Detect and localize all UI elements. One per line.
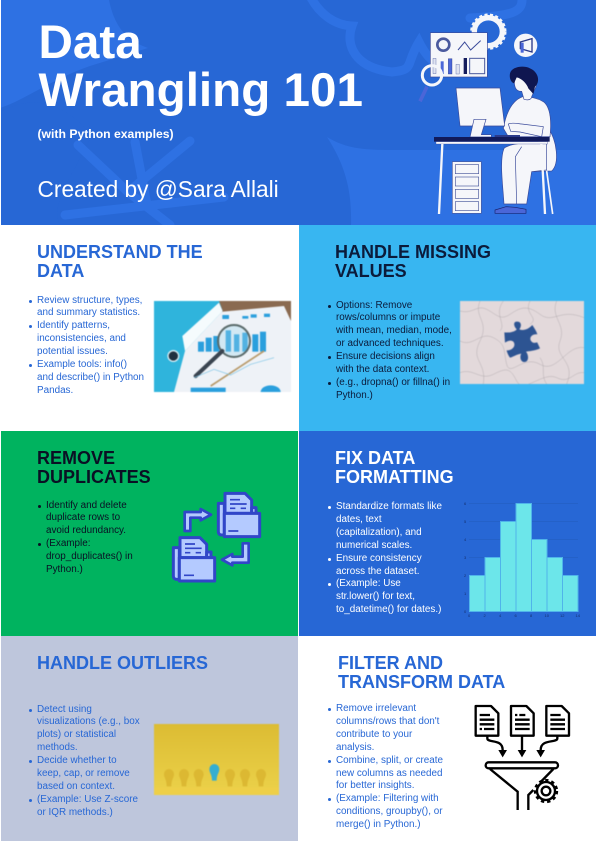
text: understand the data: [29, 294, 144, 396]
text: fix data formatting: Standardize formats like: [336, 501, 442, 512]
chart: histogram: 0: [464, 609, 467, 614]
text: understand the data: Pandas.: [37, 385, 73, 396]
icon: duplicate folders with arrows: [172, 492, 262, 582]
chart: histogram: 2: [484, 613, 486, 618]
chart: histogram: [464, 501, 581, 618]
title: [38, 16, 363, 117]
text: filter and transform data: (Example: Filtering with: [336, 793, 439, 804]
heading: understand the data: UNDERSTAND THE: [37, 242, 203, 262]
chart: histogram: 5: [464, 519, 467, 524]
text: fix data formatting: Ensure consistency: [336, 553, 422, 564]
text: filter and transform data: conditions, groupby(), or: [336, 806, 442, 817]
text: filter and transform data: Remove irrelevant: [336, 703, 416, 714]
chart: histogram: 0: [468, 613, 471, 618]
icon: megaphone: [514, 34, 537, 57]
text: handle missing values: Python.): [336, 390, 373, 401]
text: filter and transform data: new columns as needed: [336, 768, 442, 779]
text: handle missing values: with mean, median, mode,: [336, 325, 452, 336]
text: remove duplicates: drop_duplicates() in: [46, 551, 133, 562]
text: fix data formatting: dates, text: [336, 514, 382, 525]
chart: histogram: 6: [514, 613, 518, 618]
chart: histogram: 4: [464, 537, 467, 542]
text: understand the data: inconsistencies, and: [37, 333, 126, 344]
heading: remove duplicates: [37, 448, 151, 487]
heading: handle missing values: VALUES: [335, 261, 407, 281]
text: remove duplicates: [38, 500, 133, 575]
subtitle: (with Python examples): [38, 126, 174, 140]
panel: filter and transform data: [299, 636, 596, 841]
text: handle missing values: with the data context.: [336, 364, 429, 375]
photo: puzzle with missing piece: [459, 300, 585, 385]
text: remove duplicates: (Example:: [46, 538, 90, 549]
heading: remove duplicates: DUPLICATES: [37, 467, 151, 487]
chart: histogram: 4: [499, 613, 502, 618]
heading: filter and transform data: TRANSFORM DATA: [338, 672, 505, 692]
text: filter and transform data: for better insights.: [336, 780, 414, 791]
text: fix data formatting: (capitalization), and: [336, 527, 422, 538]
text: handle missing values: Ensure decisions align: [336, 351, 435, 362]
text: fix data formatting: numerical scales.: [336, 540, 412, 551]
text: remove duplicates: avoid redundancy.: [46, 525, 126, 536]
text: understand the data: potential issues.: [37, 346, 108, 357]
text: filter and transform data: Combine, split, or create: [336, 755, 443, 766]
text: understand the data: Example tools: info(): [37, 359, 127, 370]
text: handle outliers: or IQR methods.): [37, 807, 113, 818]
chart: histogram: 6: [464, 501, 467, 506]
text: understand the data: and summary statistics.: [37, 307, 140, 318]
title: Wrangling 101: [38, 64, 363, 117]
chart: histogram: 1: [464, 591, 467, 596]
text: fix data formatting: (Example: Use: [336, 578, 401, 589]
text: handle missing values: (e.g., dropna() or fillna() in: [336, 377, 450, 388]
filing cabinet: [452, 162, 481, 213]
icon: magnifying glass: [420, 66, 442, 101]
header background shapes: [1, 0, 596, 225]
chart: histogram: 10: [544, 613, 550, 618]
text: handle missing values: [328, 300, 452, 401]
person: [495, 67, 551, 213]
text: fix data formatting: [328, 501, 442, 615]
desk: [434, 137, 550, 214]
text: handle outliers: Detect using: [37, 704, 92, 714]
panel: header banner: [1, 0, 596, 225]
chart: histogram: 3: [464, 555, 467, 560]
text: filter and transform data: contribute to your: [336, 729, 412, 740]
panel: remove duplicates: [1, 431, 298, 636]
text: handle outliers: plots) or statistical: [37, 729, 116, 740]
panel: understand the data: [1, 225, 298, 431]
chart board: [430, 33, 487, 77]
text: handle outliers: Decide whether to: [37, 755, 117, 766]
chart: histogram: 8: [530, 613, 533, 618]
text: fix data formatting: to_datetime() for dates.): [336, 604, 441, 615]
panel: fix data formatting: [299, 431, 596, 636]
title: Data: [38, 16, 142, 69]
heading: handle outliers: HANDLE OUTLIERS: [37, 653, 208, 673]
text: handle outliers: (Example: Use Z-score: [37, 794, 138, 805]
author credit: Created by @Sara Allali: [38, 176, 279, 202]
text: filter and transform data: columns/rows that don't: [336, 716, 439, 727]
illustration: person at desk with charts: [418, 14, 557, 214]
heading: filter and transform data: [338, 653, 505, 692]
chart: histogram: 12: [560, 613, 565, 618]
heading: understand the data: [37, 242, 203, 281]
text: handle outliers: keep, cap, or remove: [37, 768, 130, 779]
chart: histogram: 14: [576, 613, 581, 618]
monitor: [456, 88, 520, 138]
chair: [532, 128, 556, 172]
panel: handle missing values: [299, 225, 596, 431]
chart: histogram: 2: [464, 573, 467, 578]
icon: documents into funnel with gear: [474, 704, 570, 810]
text: handle missing values: rows/columns or impute: [336, 312, 440, 323]
text: handle missing values: Options: Remove: [336, 300, 412, 310]
panel: handle outliers: [1, 636, 298, 841]
text: handle outliers: based on context.: [37, 781, 115, 792]
heading: fix data formatting: FIX DATA: [335, 448, 415, 468]
photo: folder and magnifier on charts: [153, 300, 292, 393]
text: handle missing values: or advanced techniques.: [336, 338, 444, 349]
photo: yellow bulbs with one blue bulb: [153, 723, 280, 796]
heading: remove duplicates: REMOVE: [37, 448, 115, 468]
text: understand the data: Identify patterns,: [37, 320, 110, 331]
text: filter and transform data: merge() in Python.): [336, 819, 421, 830]
text: understand the data: and describe() in Python: [37, 372, 144, 383]
heading: filter and transform data: FILTER AND: [338, 653, 443, 673]
icon: gear: [535, 780, 557, 802]
heading: handle missing values: [335, 242, 491, 281]
heading: fix data formatting: [335, 448, 454, 487]
heading: fix data formatting: FORMATTING: [335, 467, 454, 487]
text: filter and transform data: [328, 703, 443, 830]
text: remove duplicates: Python.): [46, 564, 83, 575]
heading: understand the data: DATA: [37, 261, 84, 281]
text: remove duplicates: duplicate rows to: [46, 512, 120, 523]
text: fix data formatting: str.lower() for text,: [336, 591, 415, 602]
text: remove duplicates: Identify and delete: [46, 500, 127, 510]
text: filter and transform data: analysis.: [336, 742, 374, 753]
text: handle outliers: visualizations (e.g., box: [37, 716, 140, 727]
text: handle outliers: [29, 704, 140, 818]
text: understand the data: Review structure, types,: [37, 294, 142, 306]
icon: gear: [472, 15, 505, 48]
text: handle outliers: methods.: [37, 742, 78, 753]
heading: handle missing values: HANDLE MISSING: [335, 242, 491, 262]
text: fix data formatting: across the dataset.: [336, 566, 419, 577]
